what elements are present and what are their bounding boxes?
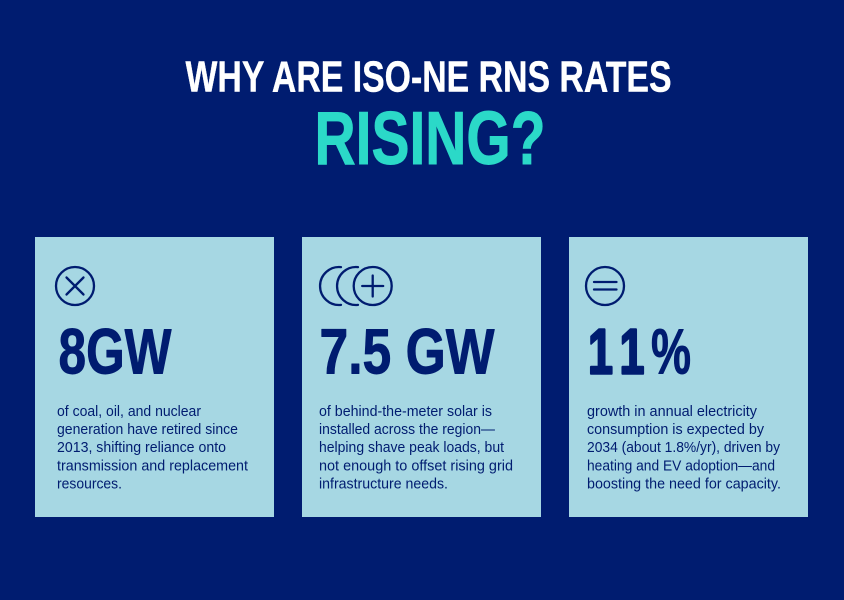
title: WHY ARE ISO-NE RNS RATES	[186, 54, 672, 102]
text: retired generation description: generation have retired since	[57, 421, 238, 438]
text: demand growth description: boosting the need for capacity.	[587, 476, 781, 492]
stat: 7.5 GW: 7.5 GW	[320, 316, 495, 388]
icon: circled equals	[586, 267, 624, 305]
text: demand growth description: 2034 (about 1.8%/yr), driven by	[587, 439, 780, 456]
panel: behind-the-meter solar	[302, 237, 541, 517]
stat: 11%	[588, 316, 691, 388]
text: solar description: infrastructure needs.	[319, 476, 448, 492]
title: RISING?	[314, 96, 546, 180]
text: retired generation description: 2013, shifting reliance onto	[57, 439, 226, 456]
text: solar description: helping shave peak loads, but	[319, 439, 505, 456]
text: solar description: not enough to offset rising grid	[319, 458, 513, 474]
text: retired generation description	[57, 403, 249, 492]
text: retired generation description: transmission and replacement	[57, 458, 249, 474]
panel: demand growth	[569, 237, 808, 517]
stat: 8GW: 8GW	[58, 316, 172, 388]
text: demand growth description: consumption is expected by	[587, 421, 764, 438]
stat: 11%: %	[651, 316, 691, 388]
text: demand growth description: heating and EV adoption—and	[587, 458, 775, 474]
text: demand growth description: growth in annual electricity	[587, 403, 757, 420]
text: solar description: installed across the region—	[319, 421, 495, 438]
text: solar description: of behind-the-meter solar is	[319, 403, 492, 420]
stat: 11%: 1	[588, 316, 613, 388]
title	[186, 54, 672, 180]
text: retired generation description: of coal, oil, and nuclear	[57, 403, 201, 420]
icon: overlapping circles with plus	[320, 267, 392, 305]
text: retired generation description: resources.	[57, 476, 122, 492]
text: demand growth description	[587, 403, 781, 492]
icon: circled x	[56, 267, 94, 305]
panel: retired generation	[35, 237, 274, 517]
text: solar description	[319, 403, 513, 492]
stat: 11%: 1	[620, 316, 644, 388]
